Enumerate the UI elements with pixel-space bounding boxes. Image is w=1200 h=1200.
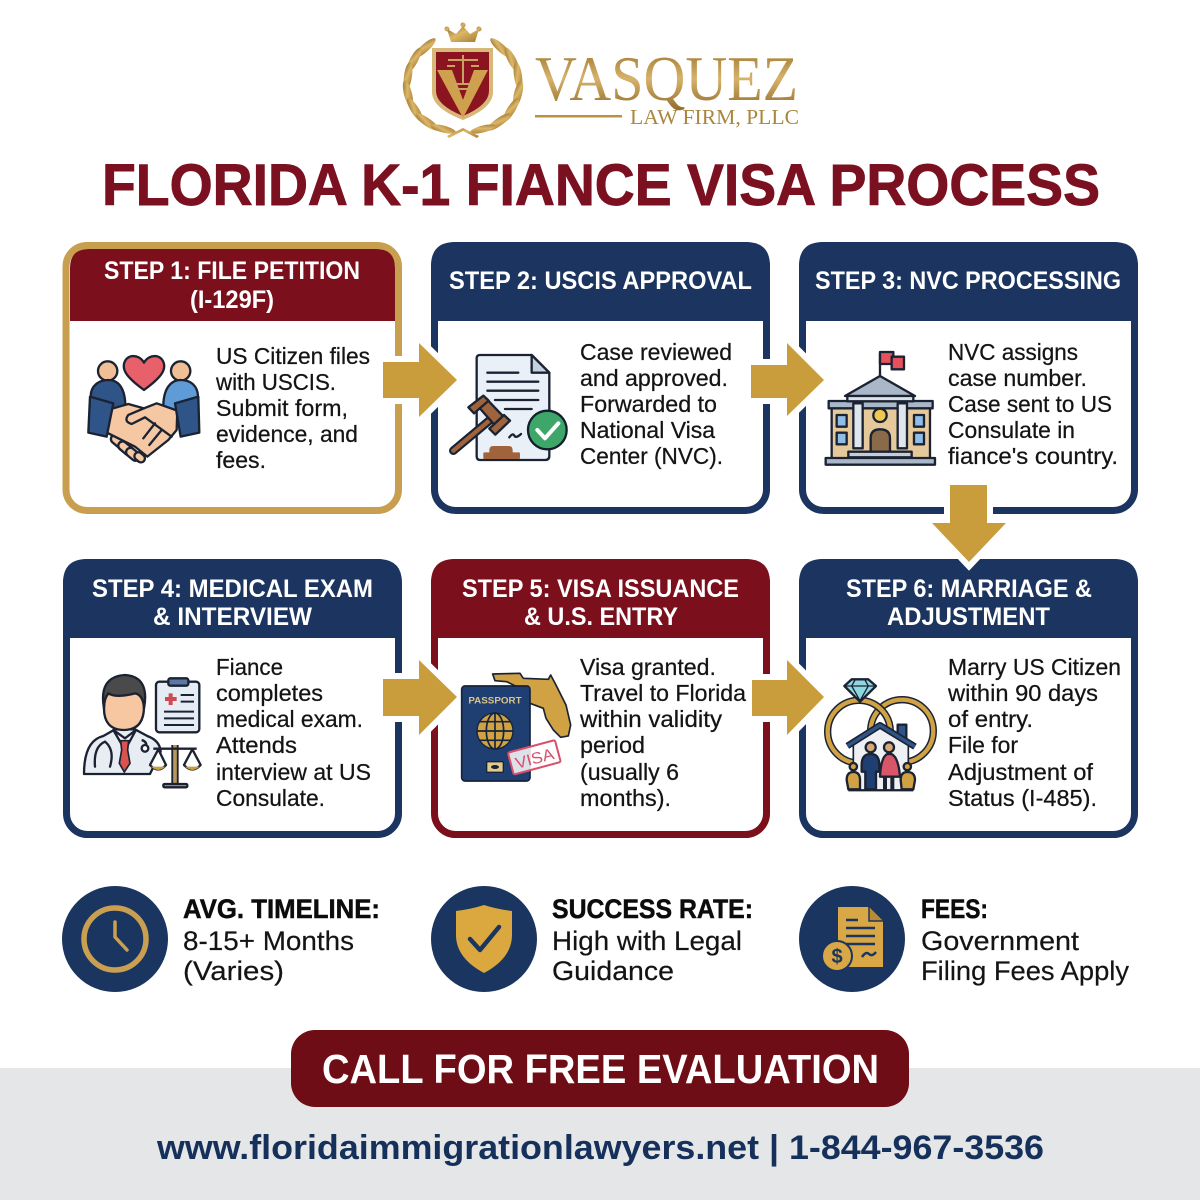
title: FLORIDA K-1 FIANCE VISA PROCESS <box>102 153 1100 218</box>
icon: laurel wreath <box>401 36 525 138</box>
step 4 heading: STEP 4: MEDICAL EXAM <box>92 575 373 603</box>
icon: approved document with gavel <box>453 355 567 460</box>
icon: doctor with clipboard and scales <box>84 675 201 787</box>
step 6 heading: STEP 6: MARRIAGE & <box>846 575 1092 603</box>
step 6 text: Status (I-485). <box>948 785 1097 811</box>
panel: step 2 card <box>431 242 770 510</box>
icon: wedding rings and family home <box>828 679 933 790</box>
stat text: 8-15+ Months <box>183 926 354 956</box>
stat text <box>921 894 1129 986</box>
call to action button <box>291 1030 909 1107</box>
panel: step 4 card <box>63 559 402 834</box>
step 6 text: Marry US Citizen <box>948 654 1121 680</box>
stat: success rate <box>431 886 753 992</box>
step 2 text: National Visa <box>580 417 715 443</box>
step 6 text: within 90 days <box>947 680 1098 706</box>
stat: average timeline <box>62 886 380 992</box>
icon: clock <box>62 886 168 992</box>
step 4 text: interview at US <box>216 759 371 785</box>
icon: government building <box>826 352 935 465</box>
step 4 heading <box>92 575 373 631</box>
step 4 text: Consulate. <box>216 785 325 811</box>
logo subtitle: LAW FIRM, PLLC <box>630 105 799 129</box>
call to action button: CALL FOR FREE EVALUATION <box>322 1046 879 1092</box>
step 5 heading <box>462 575 739 631</box>
icon: bill with coin <box>799 886 905 992</box>
step 1 text: evidence, and <box>216 421 358 447</box>
arrow: step 3 to step 6 <box>932 485 1006 562</box>
stat text <box>183 894 380 986</box>
arrow: step 5 to step 6 <box>752 660 824 735</box>
stat text: Government <box>921 926 1080 956</box>
stat: fees <box>799 886 1129 992</box>
logo: Vasquez Law Firm <box>401 22 799 138</box>
arrow: step 4 to step 5 <box>383 660 457 735</box>
stat text: (Varies) <box>183 956 284 986</box>
step 3 text: NVC assigns <box>948 339 1078 365</box>
step 1 text: fees. <box>216 447 266 473</box>
arrow: step 2 to step 3 <box>751 343 824 416</box>
step 4 text: medical exam. <box>216 706 363 732</box>
panel: step 5 card <box>431 559 770 834</box>
logo wordmark: VASQUEZ <box>535 43 798 114</box>
icon: handshake with heart <box>88 356 199 464</box>
step 5 text: months). <box>580 785 671 811</box>
step 6 heading: ADJUSTMENT <box>887 603 1050 631</box>
panel: step 3 card <box>799 242 1138 510</box>
step 6 text <box>947 654 1121 811</box>
step 3 text: Case sent to US <box>948 391 1112 417</box>
step 3 text: case number. <box>948 365 1087 391</box>
step 2 heading: STEP 2: USCIS APPROVAL <box>449 267 752 295</box>
step 5 text: within validity <box>579 706 723 732</box>
step 5 text: Visa granted. <box>580 654 716 680</box>
step 5 heading: STEP 5: VISA ISSUANCE <box>462 575 739 603</box>
step 5 text <box>579 654 746 811</box>
step 3 text <box>948 339 1118 469</box>
stat text: FEES: <box>921 894 988 924</box>
icon: passport, Florida map and visa stamp: VISA <box>514 746 556 773</box>
step 6 text: Adjustment of <box>948 759 1094 785</box>
step 6 heading <box>846 575 1092 631</box>
step 3 text: fiance's country. <box>948 443 1118 469</box>
step 1 text <box>215 343 370 473</box>
step 1 heading: (I-129F) <box>190 286 274 314</box>
icon: passport, Florida map and visa stamp: PASSPORT <box>468 696 522 706</box>
stat text: Filing Fees Apply <box>921 956 1129 986</box>
stat text: AVG. TIMELINE: <box>183 894 380 924</box>
step 4 text: completes <box>216 680 323 706</box>
step 2 text: Case reviewed <box>580 339 732 365</box>
icon: crown <box>444 22 482 42</box>
step 4 text: Fiance <box>216 654 283 680</box>
step 1 text: US Citizen files <box>216 343 370 369</box>
panel: step 1 card <box>66 246 398 510</box>
step 4 text <box>216 654 371 811</box>
step 2 text <box>580 339 732 469</box>
panel: step 6 card <box>799 559 1138 834</box>
icon: passport, Florida map and visa stamp <box>462 673 571 781</box>
step 3 heading: STEP 3: NVC PROCESSING <box>815 267 1121 295</box>
step 4 heading: & INTERVIEW <box>153 603 312 631</box>
step 1 heading: STEP 1: FILE PETITION <box>104 257 360 285</box>
arrow: step 1 to step 2 <box>383 343 457 417</box>
icon: shield check <box>431 886 537 992</box>
stat text <box>552 894 753 986</box>
icon: bill with coin: $ <box>831 946 843 968</box>
step 3 text: Consulate in <box>948 417 1075 443</box>
stat text: High with Legal <box>552 926 742 956</box>
step 1 text: with USCIS. <box>215 369 336 395</box>
stat text: Guidance <box>552 956 674 986</box>
step 1 heading <box>104 257 360 314</box>
step 2 text: and approved. <box>580 365 728 391</box>
step 5 text: (usually 6 <box>580 759 679 785</box>
step 6 text: File for <box>948 732 1018 758</box>
step 6 text: of entry. <box>948 706 1033 732</box>
step 2 text: Forwarded to <box>580 391 717 417</box>
step 5 heading: & U.S. ENTRY <box>524 603 678 631</box>
stat text: SUCCESS RATE: <box>552 894 753 924</box>
footer contact line: www.floridaimmigrationlawyers.net | 1-844-967-3536 <box>156 1129 1044 1167</box>
step 2 text: Center (NVC). <box>580 443 723 469</box>
step 5 text: Travel to Florida <box>580 680 746 706</box>
step 5 text: period <box>580 732 645 758</box>
icon: shield with scales and V <box>432 48 493 120</box>
step 1 text: Submit form, <box>216 395 348 421</box>
step 4 text: Attends <box>216 732 297 758</box>
